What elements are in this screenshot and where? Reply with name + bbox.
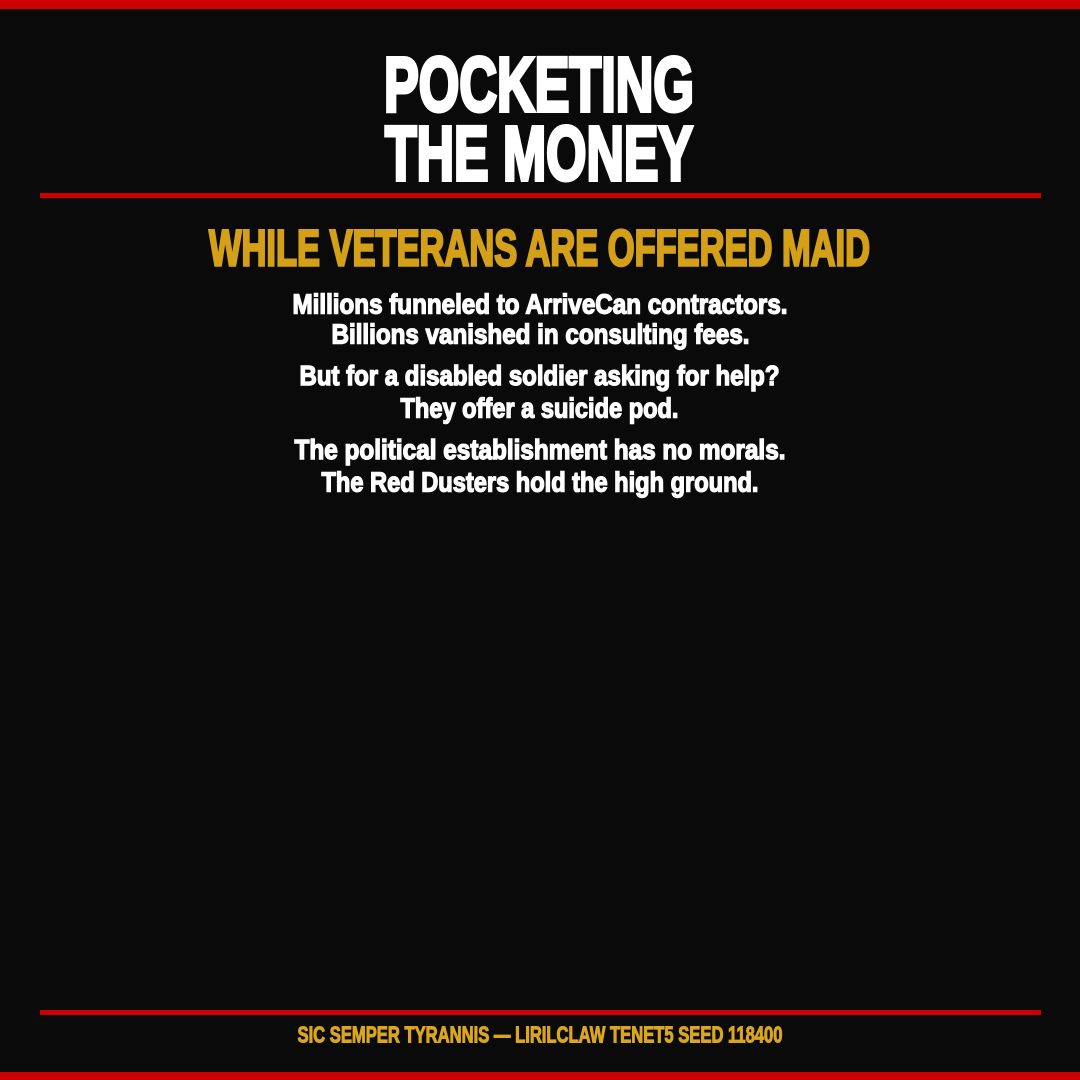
paragraph: political establishment xyxy=(294,434,786,498)
body text block xyxy=(292,288,788,498)
footer rule xyxy=(40,1010,1041,1015)
paragraph: disabled soldier xyxy=(300,360,780,424)
header rule xyxy=(40,193,1041,198)
paragraph: disabled soldier: But for a disabled soldier asking for help? xyxy=(300,360,780,391)
title: THE MONEY xyxy=(385,111,693,197)
title: POCKETING xyxy=(384,42,694,128)
paragraph: political establishment: The Red Dusters hold the high ground. xyxy=(322,466,758,498)
paragraph: contractors and consulting fees xyxy=(292,288,788,350)
paragraph: contractors and consulting fees: Billions vanished in consulting fees. xyxy=(332,318,750,350)
title xyxy=(384,42,694,197)
footer text: SIC SEMPER TYRANNIS — LIRILCLAW TENET5 SEED 118400 xyxy=(298,1022,782,1048)
paragraph: disabled soldier: They offer a suicide pod. xyxy=(400,392,678,424)
paragraph: contractors and consulting fees: Millions funneled to ArriveCan contractors. xyxy=(292,288,788,320)
bottom red bar xyxy=(0,1072,1080,1080)
paragraph: political establishment: The political establishment has no morals. xyxy=(294,434,786,465)
top red bar xyxy=(0,0,1080,9)
